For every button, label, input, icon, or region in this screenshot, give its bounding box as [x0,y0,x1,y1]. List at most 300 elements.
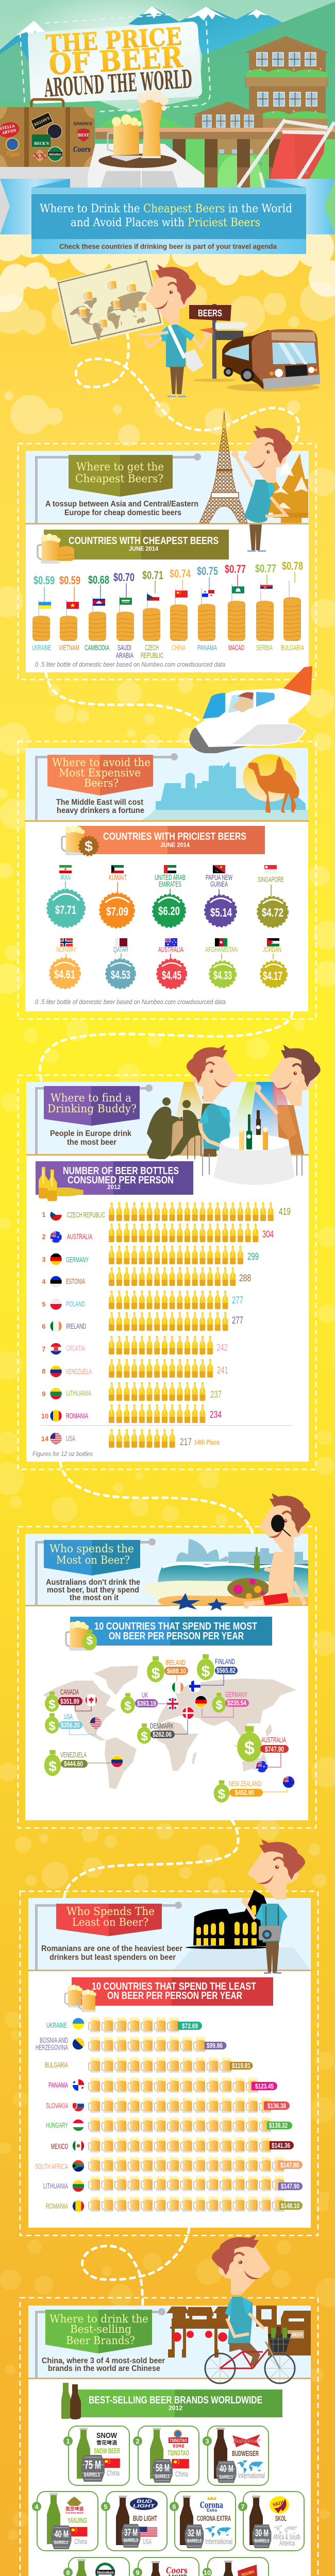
chart date: 2012 [169,2404,182,2412]
country labels: CAMBODIA [85,643,109,652]
heading line 3: Beers? [84,777,119,789]
callout: Australia: $747.90 [265,1745,284,1754]
chart banner [36,1161,193,1195]
row: Romania [46,2196,303,2212]
chart title: COUNTRIES WITH CHEAPEST BEERS [69,535,219,547]
row: South Africa: SOUTH AFRICA [35,2162,68,2171]
silhouette people [147,1094,212,1159]
chart date: 2012 [107,1183,121,1191]
bracket [35,753,178,821]
banner [56,1904,162,1936]
price caps row 1: $7.71 [55,903,76,917]
brand 7: Skol: BARRELS [255,2538,269,2544]
row: Romania: ROMANIA [66,1412,88,1420]
price caps row 2 [50,938,287,988]
callout: Venezuela: VENEZUELA [60,1751,87,1759]
heading: Where to avoid the [52,756,150,769]
bracket [35,1902,182,1970]
brand 3: Budweiser: 3 [205,2437,209,2445]
value labels: $0.75 [197,565,218,578]
callout: Ireland [147,1656,188,1693]
icon: mug and coin [62,825,98,855]
chart banner [72,1977,273,2006]
chart title: COUNTRIES WITH PRICIEST BEERS [103,831,246,842]
row: South Africa [35,2156,303,2172]
price caps row 2: $4.33 [213,969,232,982]
description: People in Europe drink [50,1129,131,1138]
callout: Denmark: $ [141,1730,148,1743]
suitcase: XX [34,152,46,160]
row: Slovakia: SLOVAKIA [46,2102,68,2110]
dashed route 1 [76,334,299,443]
chart date: JUNE 2014 [160,841,190,849]
brand 1: Snow Beer: 雪花啤酒 [96,2439,117,2446]
icon: pagoda [268,453,308,523]
row: Estonia: 4 [42,1278,46,1285]
price caps row 2: $4.17 [263,969,282,982]
table [0,144,204,188]
surfboard [227,1578,270,1599]
row: Romania: 10 [41,1412,48,1420]
bushes [186,139,335,188]
ribbon heading line 1: Where to Drink the Cheapest Beers in the World [40,202,292,215]
callout: Canada [45,1688,100,1712]
row: USA: 14th Place [194,1438,220,1446]
value labels [34,560,303,587]
price caps row 1: $7.09 [106,905,128,918]
row: Ukraine: $72.69 [182,2022,198,2030]
banner [45,2310,152,2353]
row: Venezuela [42,1359,228,1378]
bracket [35,1084,153,1154]
brand 4: Yanjing: 40 M [55,2529,69,2540]
chart title line 2: ON BEER PER PERSON PER YEAR [109,1631,244,1642]
row: Lithuania: LITHUANIA [43,2182,68,2191]
brand 3: Budweiser: Budweiser [232,2437,261,2445]
bracket [35,453,201,523]
price caps row 1: SINGAPORE [258,875,284,884]
frame: who spends least [20,1839,318,2235]
value labels: $0.59 [34,574,55,587]
icon: sand [158,1596,308,1605]
row: Bulgaria [45,2057,253,2073]
price caps row 1: UNITED ARAB [155,873,186,882]
bicycle rider [205,2234,295,2383]
heading: Who Spends The [66,1905,155,1918]
chart date: JUNE 2014 [129,545,158,552]
brand 3: Budweiser: BUDWEISER [232,2449,259,2458]
brand 4: Yanjing: China [74,2537,87,2546]
table with beers [203,1110,302,1185]
brand 7: Skol: 30 M [255,2528,269,2539]
row: Estonia [42,1267,251,1287]
callout: Ireland: $ [152,1665,160,1682]
country labels: BULGARIA [281,643,304,652]
value labels: $0.59 [59,574,80,587]
right drinking buddy [254,1044,322,1154]
callout: Canada: $ [48,1698,56,1711]
row: USA [41,1429,220,1448]
chart title: 10 COUNTRIES THAT SPEND THE LEAST [92,1981,256,1992]
brand 2: Tsingtao: China [175,2470,188,2479]
world map poster [55,259,164,347]
bottle chart [40,1202,292,1448]
description line 2: Europe for cheap domestic beers [64,509,181,517]
icon: two mugs [65,1985,96,2012]
row: Hungary: HUNGARY [46,2121,68,2130]
brand 10: Brahma [203,2557,269,2576]
description: Romanians are one of the heaviest beer [41,1944,182,1953]
callout: Australia: AUSTRALIA [261,1736,286,1744]
row: Germany: 3 [42,1256,46,1263]
brand 5: Bud Light: USA [143,2537,152,2546]
brand 9: Coors Light [133,2557,199,2576]
banner [44,1086,140,1126]
price caps row 1 [47,865,288,927]
callout: Denmark [137,1707,197,1744]
country labels: SERBIA [256,643,273,652]
heading: of beer: OF BEER [48,40,184,82]
row: Bosnia and Herzegovina: BOSNIA AND [40,2036,68,2045]
icon: city skyline [142,761,308,820]
brand 6: Corona Extra [170,2492,236,2551]
brand 2: Tsingtao [133,2426,199,2485]
banner [69,455,173,497]
dashed route 5 [64,1820,238,1900]
callout: Venezuela: $ [48,1758,57,1774]
chart title line 2: CONSUMED PER PERSON [68,1175,174,1186]
description line 2: the most beer [67,1138,116,1147]
sign text: BEERS [198,308,222,318]
row: Ireland: IRELAND [66,1322,86,1331]
brand 3: Budweiser [203,2426,269,2485]
row: Ukraine [46,2016,202,2032]
frame: cheapest beers [18,411,316,680]
brand 5: Bud Light: 37 M [124,2528,138,2538]
callout: Ireland: IRELAND [165,1658,186,1667]
description line 2: brands in the world are Chinese [48,2364,160,2373]
row: Mexico: $141.36 [272,2141,290,2149]
price caps row 1: IRAN [60,873,71,882]
callout: UK: $ [124,1699,131,1713]
dashed route 3 [40,1012,292,1082]
heading: Where to get the [76,461,164,473]
chart title: 10 COUNTRIES THAT SPEND THE MOST [94,1621,257,1632]
suitcase: Coors [73,145,91,154]
ground plaza [173,1947,311,1971]
price caps row 2: $4.61 [54,968,75,981]
deck chair [238,120,334,188]
country labels: UKRAINE [32,643,51,652]
icon: eiffel tower [199,411,247,523]
row: Romania [41,1404,222,1423]
heading line 3: Beer Brands? [66,2334,135,2347]
footnote: 0 .5 liter bottle of domestic beer based on Numbeo.com crowdsourced data [35,998,226,1006]
person [139,264,212,397]
description line 2: heavy drinkers a fortune [57,806,144,815]
brand 4: Yanjing: 燕京啤酒 [65,2506,83,2512]
beach person [246,1493,310,1608]
bus [222,329,320,392]
description: The Middle East will cost [56,798,144,807]
icon: mug and money bag [66,1621,97,1651]
frame: best selling brands [20,2234,318,2576]
brand 4: Yanjing: BARRELS [54,2540,68,2545]
heading: Where to drink the [49,2313,148,2325]
callout: Australia: $ [244,1737,255,1758]
callout: Canada: $351.89 [60,1697,79,1705]
icon: tall beer glass [137,90,169,158]
row: Slovakia [46,2097,290,2113]
row: Australia [42,1224,274,1243]
callout: Finland: $ [202,1663,210,1680]
brand 5: Bud Light: LIGHT [133,2503,156,2509]
row: Panama: PANAMA [48,2081,68,2090]
frame: drinking buddy [18,1044,322,1469]
coin stacks chart [32,560,304,660]
callout: USA: $ [48,1719,56,1733]
callout: Germany: $ [215,1698,223,1712]
brand 7: Skol: 7 [241,2503,245,2511]
callout: New Zealand [214,1776,297,1803]
callout: Finland: FINLAND [215,1657,235,1666]
callout: Germany: GERMANY [225,1690,247,1699]
row: Germany [42,1246,259,1265]
brand 3: Budweiser: BARRELS [220,2475,233,2480]
price caps row 1: GUINEA [210,880,228,889]
row: Venezuela: 241 [217,1365,228,1376]
value labels: $0.78 [282,560,303,572]
row: Ireland: 6 [42,1323,46,1330]
row: Germany: GERMANY [66,1256,89,1264]
brand 5: Bud Light: BUD [137,2499,152,2504]
row: Poland: POLAND [66,1300,85,1309]
chart title line 2: ON BEER PER PERSON PER YEAR [107,1990,242,2002]
brand 5: Bud Light [101,2492,167,2551]
row: Australia: 2 [42,1233,46,1241]
description: Australians don't drink the [46,1578,140,1587]
dashed route 2 [46,672,201,722]
brand 4: Yanjing [32,2492,98,2551]
brand 7: Skol [238,2492,304,2551]
wooden deck [95,128,335,188]
brand 7: Skol: America [279,2539,295,2548]
callout: Ireland: $688.10 [167,1667,186,1675]
heading line 2: Most on Beer? [56,1554,130,1566]
brand 2: Tsingtao: TSINGTAO [170,2438,187,2443]
row: Slovakia: $136.38 [267,2102,286,2110]
callout: Australia [237,1726,289,1773]
row: South Africa: $147.86 [280,2161,299,2169]
price caps row 2: NORWAY [56,945,76,954]
callout: Germany: $235.54 [227,1699,246,1707]
bar spotlights [170,1082,289,1141]
callout: Canada: CANADA [60,1688,79,1697]
left drinking buddy [187,1045,237,1157]
icon: green hills [0,2,335,150]
gate beer sign text: BEER [292,2332,303,2338]
row: Romania: 234 [210,1410,222,1420]
row: Hungary [46,2116,292,2132]
brand 1: Snow Beer [63,2426,129,2485]
row: Lithuania: $147.90 [281,2182,299,2190]
country labels: PANAMA [197,643,217,652]
icon: chinese gate [166,2301,311,2358]
row: Poland [42,1291,243,1310]
row: Panama [48,2077,277,2093]
ribbon heading line 2: and Avoid Places with Priciest Beers [71,216,260,229]
description: A tossup between Asia and Central/Eastern [45,500,198,509]
ribbon banner [0,179,335,254]
callout: Finland: $565.82 [216,1666,236,1674]
row: Ireland [42,1312,243,1332]
brand 1: Snow Beer: 75 M [85,2458,101,2471]
brand 5: Bud Light: 5 [104,2503,108,2511]
row: Lithuania: LITHUANIA [66,1389,91,1398]
icon: camel [248,756,299,813]
row: Croatia: 7 [42,1345,46,1353]
row: Panama: $123.45 [255,2082,274,2090]
heading line 2: Drinking Buddy? [47,1103,137,1115]
row: Hungary: $138.32 [269,2121,288,2129]
row: Lithuania: 9 [42,1390,46,1398]
dashed route 6 [82,2228,189,2307]
callout: New Zealand: NEW ZEALAND [229,1780,261,1788]
brand 6: Corona Extra: 6 [172,2503,176,2511]
callout: USA [45,1713,105,1735]
beach scene [143,1539,308,1605]
chart title: NUMBER OF BEER BOTTLES [63,1165,179,1177]
heading: the price: THE PRICE [45,23,182,59]
brand 1: Snow Beer: 1 [66,2437,70,2445]
icon: left mountain [0,21,45,63]
footnote: 0 .5 liter bottle of domestic beer based on Numbeo.com crowdsourced data [35,660,225,668]
heading line 2: Least on Beer? [72,1916,148,1928]
brand 2: Tsingtao: 58 M [156,2463,170,2474]
brand 3: Budweiser: 40 M [220,2464,233,2475]
brand 7: Skol: SKOL [275,2514,287,2523]
brand 6: Corona Extra: Corona [200,2500,223,2511]
price caps row 1: KUWAIT [109,873,127,882]
suitcase: Heineken [49,153,61,157]
country labels: CHINA [172,643,186,652]
brand 1: Snow Beer: China [107,2469,120,2478]
value labels: $0.70 [113,571,135,584]
suitcase: SPARKS [73,122,93,126]
person with camera [242,1839,305,1974]
row: Croatia [42,1336,228,1354]
row: Venezuela: 8 [42,1367,46,1375]
icon: sydney opera house [176,1539,308,1563]
icon: starfish [171,1593,228,1611]
brand 5: Bud Light: BARRELS [124,2538,138,2544]
price caps row 2: AFGHANISTAN [205,945,238,954]
description line 2: most beer, but they spend [47,1586,139,1595]
brand 1: Snow Beer: SNOW [96,2431,118,2440]
price caps row 1: PAPUA NEW [206,873,232,882]
suitcase: Tiger [6,150,20,158]
row: Poland: 5 [42,1300,46,1308]
brand 2: Tsingtao: BARRELS [155,2474,170,2480]
row: Czech Republic: 1 [42,1211,46,1218]
chart banner [44,530,229,560]
callout: Venezuela: $444.60 [64,1759,83,1768]
brand 6: Corona Extra: Extra [207,2508,217,2513]
callout: New Zealand: $ [218,1786,226,1802]
price caps row 1: $4.72 [262,906,283,919]
row: USA: 217 [180,1437,192,1448]
callout: Denmark: $262.06 [153,1730,172,1738]
brand 6: Corona Extra: CORONA EXTRA [197,2514,231,2523]
value labels: $0.68 [88,573,109,586]
footnote: Figures for 12 oz bottles [32,1450,93,1458]
row: Australia: 304 [262,1229,274,1240]
heading: Where to find a [51,1092,131,1104]
country labels: REPUBLIC [141,651,163,660]
world map [43,1654,297,1803]
row: Mexico: MEXICO [51,2142,68,2151]
brand cards [32,2426,304,2576]
row: USA: 14 [41,1435,49,1443]
country labels: SAUDI [118,643,131,652]
brand 2: Tsingtao: TSINGTAO [167,2449,189,2458]
brand 1: Snow Beer: SNOW BEER [94,2447,120,2455]
banner [47,755,153,795]
traveller with map [55,259,320,397]
signpost [189,304,248,382]
brand 4: Yanjing: YANJING BEER [65,2512,84,2514]
price caps row 2: $4.53 [111,968,130,981]
mugs chart [35,2016,303,2212]
chart title: BEST-SELLING BEER BRANDS WORLDWIDE [89,2395,262,2406]
row: Bosnia and Herzegovina: HERZEGOVINA [36,2043,68,2052]
description line 2: drinkers but least spenders on beer [49,1953,176,1962]
callout: USA: USA [64,1713,73,1721]
frame: who spends most [18,1493,316,1828]
brand 6: Corona Extra: International [205,2537,232,2546]
callout: Germany [192,1690,249,1717]
callout: Venezuela [44,1750,126,1776]
icon: colosseum [186,1890,273,1949]
heading line 2: Cheapest Beers? [75,472,163,485]
dashed route 4 [60,1462,254,1538]
brand 8: Heineken [63,2557,129,2576]
row: Croatia: CROATIA [66,1344,85,1353]
row: Lithuania [42,1382,222,1401]
row: Australia: AUSTRALIA [67,1232,92,1241]
bicycle [205,2342,295,2383]
value labels: $0.71 [142,569,163,582]
plane [189,666,312,753]
row: Ireland: 277 [232,1315,243,1326]
row: Ukraine: UKRAINE [46,2021,67,2030]
icon: mug and coins [38,534,74,564]
price caps row 1: $6.20 [158,904,180,918]
brand 8: Heineken: Heineken [97,2570,114,2575]
brand 6: Corona Extra: BARRELS [187,2538,202,2544]
heading line 2: Most Expensive [59,767,141,779]
suitcase [0,99,95,167]
row: USA: USA [66,1434,75,1443]
chart banner [74,2389,282,2417]
price caps row 2: AUSTRALIA [158,945,183,954]
country labels [32,643,304,660]
brand 2: Tsingtao: 青岛啤酒 [173,2444,184,2448]
row: Romania: ROMANIA [46,2202,68,2211]
description: China, where 3 of 4 most-sold beer [42,2357,165,2365]
icon: wave [158,1564,308,1597]
price caps row 1: $5.14 [210,906,232,919]
